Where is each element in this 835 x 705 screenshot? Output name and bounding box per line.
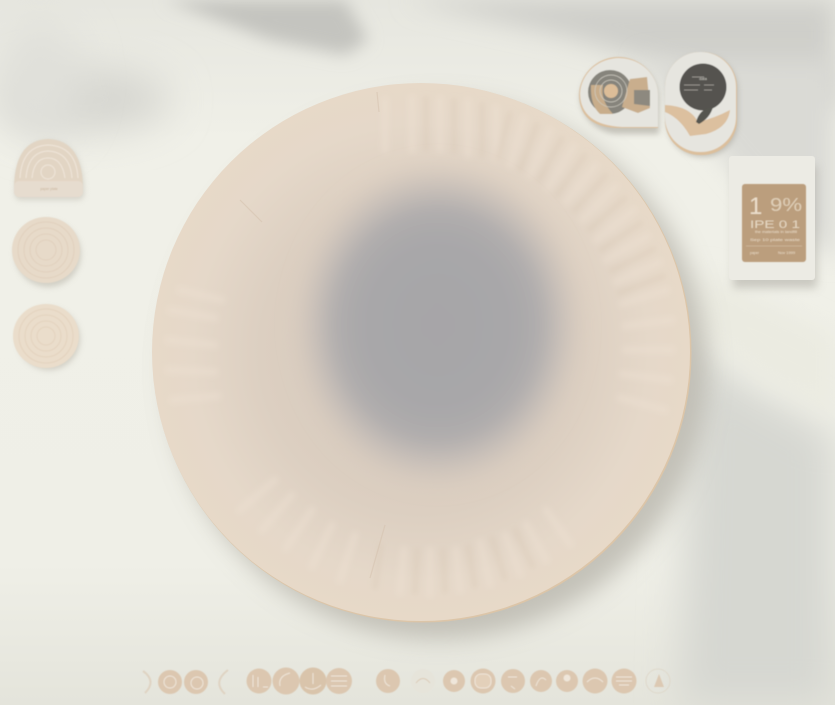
icon: circle 12 [530, 670, 552, 692]
bottom icon strip [143, 668, 670, 694]
plate drop shadow [168, 99, 708, 639]
icon: pale circle 16 [646, 669, 670, 693]
left badge: small ring disc [13, 304, 80, 370]
left badge: arch: paper plate [40, 187, 58, 191]
icon: circle 2 [184, 670, 208, 694]
grey central shadow [288, 157, 588, 493]
top right badge: oval with dark disc: data [699, 76, 708, 81]
statistic panel: Nov 1999 [778, 250, 796, 255]
icon: circle 13 [556, 670, 578, 692]
lower right shadow [680, 345, 835, 705]
icon: circle 10 [470, 668, 496, 694]
left badge: arch [14, 139, 84, 200]
top right badge: teardrop with grey disc [579, 57, 659, 134]
plate surface [152, 83, 690, 621]
icon: circle 4 [272, 668, 300, 694]
plate fluted rim [168, 98, 672, 594]
paper plate [152, 83, 692, 622]
statistic panel: IPE 0 1 [750, 219, 800, 231]
top right badge: oval with dark disc [665, 52, 738, 157]
icon: circle 7 [376, 669, 400, 693]
icon: circle 1 [158, 670, 182, 694]
icon: circle 11 [501, 669, 525, 693]
icon: circle 5 [300, 668, 326, 694]
statistic panel: the materials in landfill [755, 230, 797, 234]
left badge: ring disc [12, 217, 81, 287]
icon: circle 6 [326, 668, 352, 694]
icon: pale circle 8 [411, 669, 435, 693]
icon: crescent 2 [219, 670, 228, 694]
statistic panel: paper [750, 251, 760, 255]
statistic panel: 1 [749, 193, 762, 220]
plate creases [240, 92, 385, 578]
statistic panel: 9% [770, 195, 802, 215]
statistic card [729, 156, 817, 288]
light beam [700, 270, 835, 415]
plate rim edge [152, 84, 692, 622]
icon: circle 14 [582, 668, 608, 694]
statistic panel [742, 184, 806, 262]
icon: crescent [143, 671, 151, 693]
icon: circle 15 [612, 668, 636, 694]
icon: circle 3 [246, 668, 272, 694]
statistic panel: Sep 10 plate waste [750, 238, 800, 242]
icon: circle 9 [443, 670, 465, 692]
